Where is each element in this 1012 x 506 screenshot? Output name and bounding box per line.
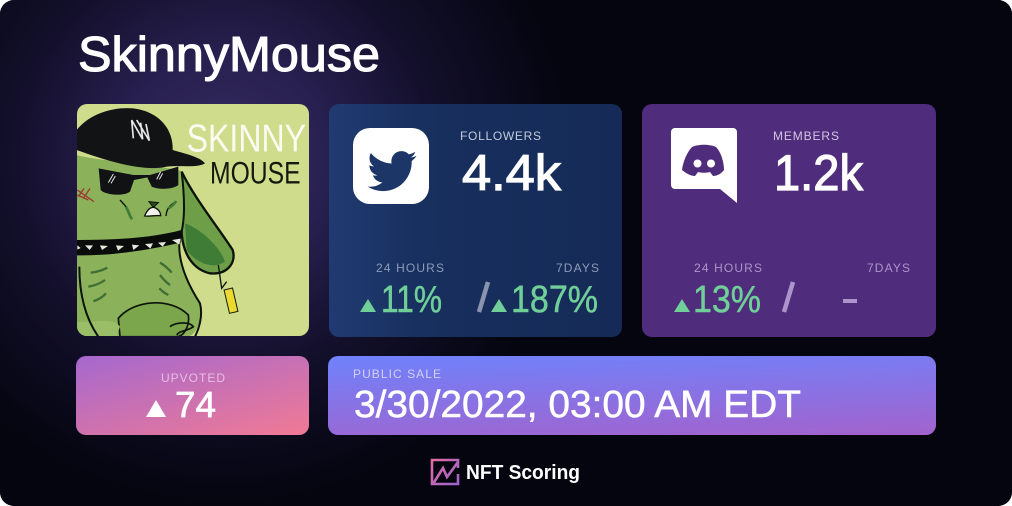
rabbit ear: [182, 172, 234, 273]
7 days label: 7DAYS: [867, 261, 910, 275]
followers value: 4.4k: [462, 145, 562, 201]
24 hours change: 11%: [381, 279, 442, 321]
rabbit body: [77, 155, 201, 337]
panel: twitter: [329, 104, 622, 337]
skinny lettering: SKINNY: [187, 117, 306, 161]
panel: project artwork: [77, 104, 309, 337]
sunglasses: [99, 167, 178, 195]
members value: 1.2k: [774, 145, 864, 201]
icon: discord logo: [671, 128, 737, 203]
scar: [77, 188, 94, 202]
24 hours label: 24 HOURS: [694, 261, 762, 275]
7 days change: 187%: [511, 279, 598, 321]
24 hours change: 13%: [693, 279, 761, 321]
icon: twitter bird: [353, 128, 429, 204]
slash separator: [479, 282, 488, 312]
yellow tag: [218, 265, 227, 288]
panel: public sale: [328, 356, 936, 435]
public sale date: 3/30/2022, 03:00 AM EDT: [354, 384, 801, 426]
7 days value: [843, 299, 857, 303]
cap: [77, 108, 205, 168]
icon: chart logo: [432, 460, 458, 484]
public sale label: PUBLIC SALE: [353, 367, 441, 381]
7 days label: 7DAYS: [556, 261, 599, 275]
upvoted label: UPVOTED: [161, 371, 225, 385]
face: [120, 200, 176, 219]
slash separator: [784, 282, 793, 312]
24 hours change: [360, 279, 442, 321]
brand name: NFT Scoring: [466, 462, 580, 484]
panel: discord: [642, 104, 936, 337]
collar: [77, 230, 182, 255]
mouse lettering: MOUSE: [210, 155, 301, 190]
brand logo: [432, 460, 580, 484]
panel: upvoted: [76, 356, 309, 435]
members label: MEMBERS: [773, 129, 839, 143]
title: SkinnyMouse: [78, 28, 380, 82]
upvoted value: [146, 384, 216, 425]
24 hours label: 24 HOURS: [376, 261, 444, 275]
upvoted value: 74: [175, 384, 216, 425]
followers label: FOLLOWERS: [460, 129, 541, 143]
